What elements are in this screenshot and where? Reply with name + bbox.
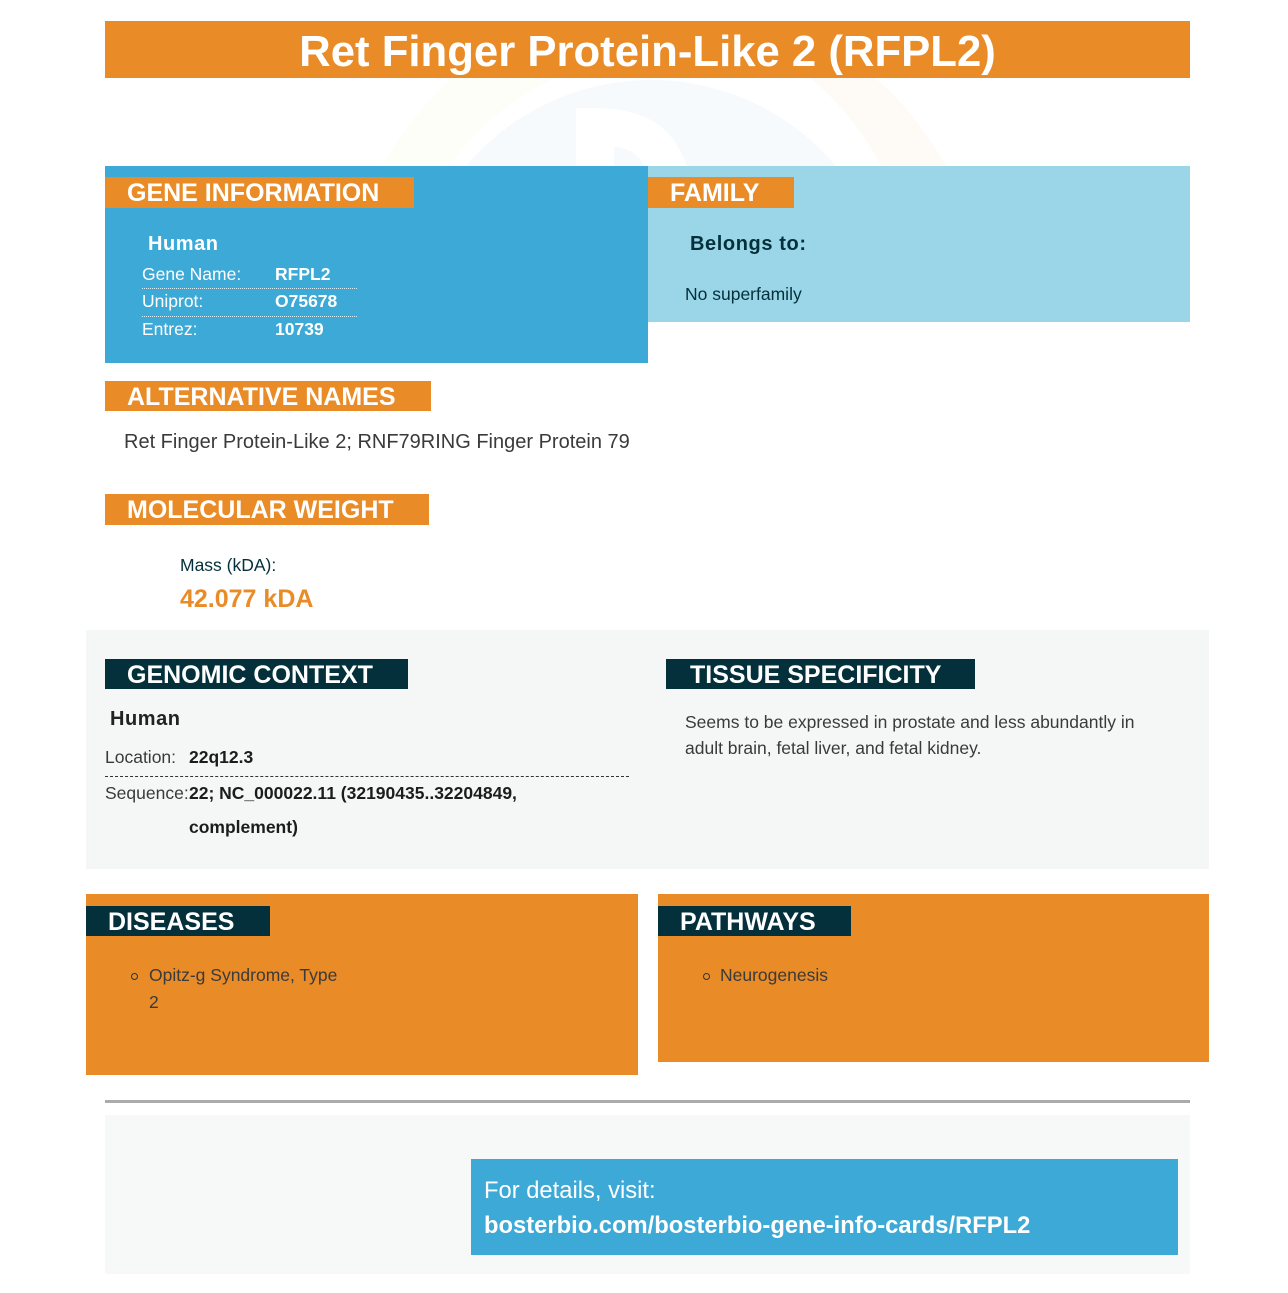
callout: details link [471,1159,1178,1255]
background watermark logo [466,78,946,166]
location row [105,744,629,777]
pathway text: Neurogenesis [720,965,828,985]
heading: family [648,177,794,208]
species label: Human [110,708,181,730]
pathway bullet [703,973,710,980]
sequence row: 22; NC_000022.11 (32190435..32204849, [189,783,517,803]
alternative names text: Ret Finger Protein-Like 2; RNF79RING Finger Protein 79 [124,431,630,453]
heading: pathways: PATHWAYS [680,908,816,936]
tissue specificity text: Seems to be expressed in prostate and less abundantly in [685,712,1134,732]
panel: footer [105,1115,1190,1274]
heading: diseases [86,906,270,936]
heading: alternative names: ALTERNATIVE NAMES [127,383,396,411]
belongs to label: Belongs to: [690,233,807,255]
uniprot row: Uniprot: [142,291,203,311]
disease text: 2 [149,992,159,1012]
heading: pathways [658,906,851,936]
heading: tissue specificity: TISSUE SPECIFICITY [690,661,941,689]
entrez row [142,319,324,339]
entrez row: Entrez: [142,319,197,339]
tissue specificity text: adult brain, fetal liver, and fetal kidney. [685,738,981,758]
callout label: For details, visit: [484,1177,656,1204]
gene name row: Gene Name: [142,264,241,284]
heading: family: FAMILY [670,179,759,207]
gene name row: RFPL2 [275,264,330,284]
sequence row: complement) [189,817,298,837]
disease text: Opitz-g Syndrome, Type [149,965,337,985]
mass label: Mass (kDA): [180,555,276,575]
uniprot row [142,289,357,317]
disease bullet [131,973,138,980]
superfamily text: No superfamily [685,284,802,304]
panel: pathways [658,894,1209,1062]
sequence row [105,783,517,837]
uniprot row: O75678 [275,291,337,311]
heading: gene information: GENE INFORMATION [127,179,379,207]
heading: molecular weight: MOLECULAR WEIGHT [127,496,394,524]
panel: diseases [86,894,638,1075]
panel: gene information [105,166,648,363]
entrez row: 10739 [275,319,324,339]
gene name row [142,261,357,289]
panel: genomic context and tissue specificity [86,630,1209,869]
disease text [149,965,337,1012]
heading: diseases: DISEASES [108,908,234,936]
title banner: Ret Finger Protein-Like 2 (RFPL2) [299,27,996,76]
tissue specificity text [685,712,1134,758]
title banner [105,21,1190,78]
heading: genomic context: GENOMIC CONTEXT [127,661,373,689]
callout url: bosterbio.com/bosterbio-gene-info-cards/RFPL2 [484,1212,1030,1239]
species label: Human [148,233,219,255]
location row: 22q12.3 [189,747,253,767]
location row: Location: [105,747,176,767]
mass value: 42.077 kDA [180,585,313,613]
sequence row: Sequence: [105,783,189,803]
panel: family [648,166,1190,322]
